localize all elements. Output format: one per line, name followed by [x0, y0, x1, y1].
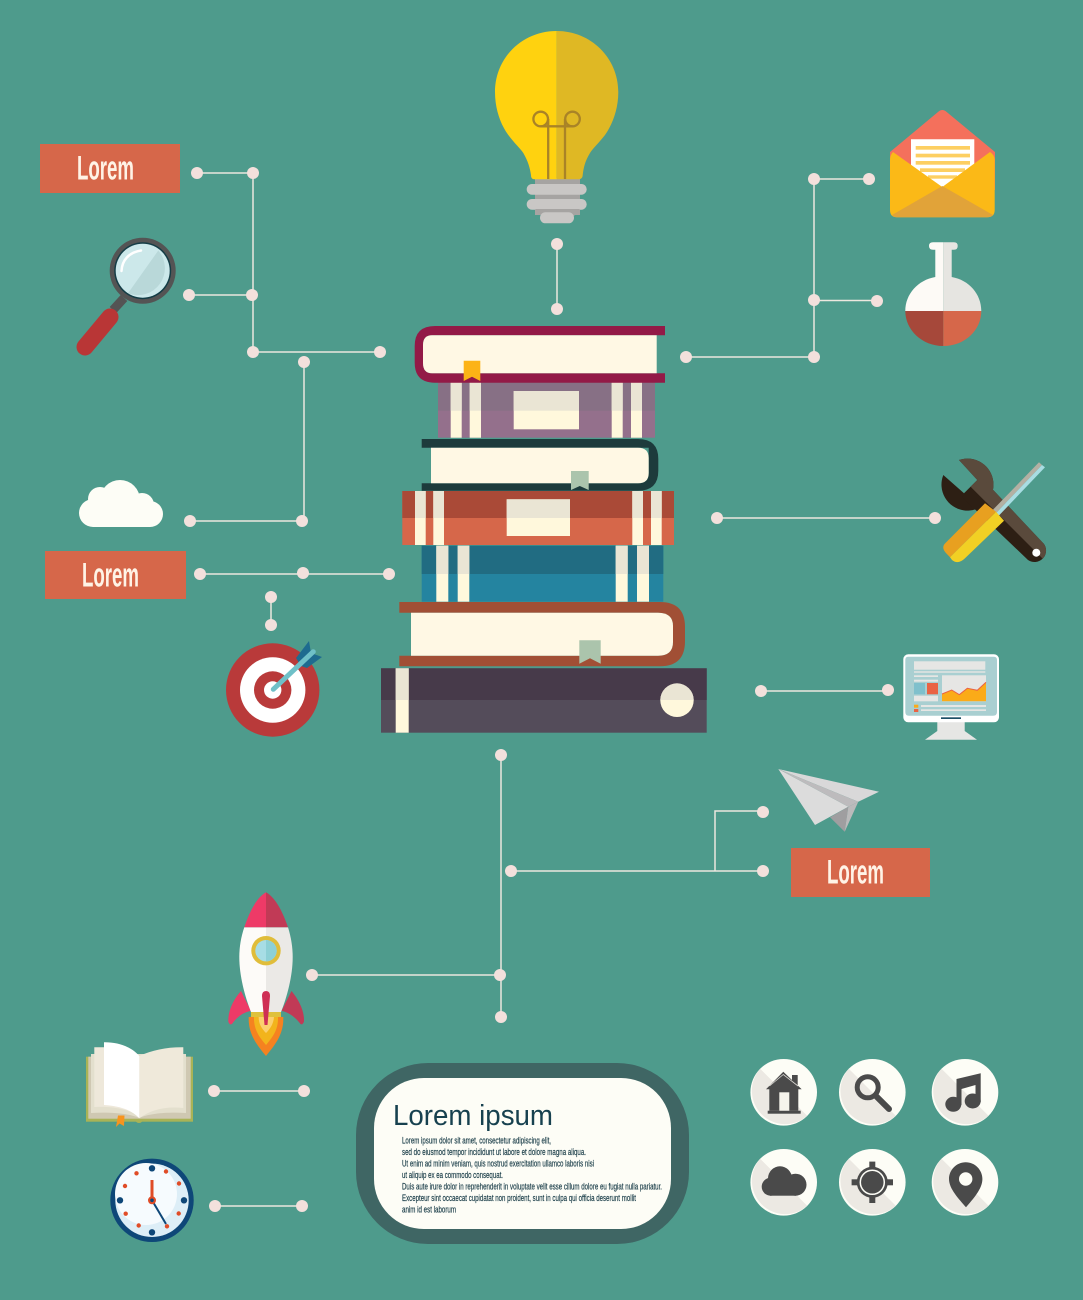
icon: envelope	[890, 110, 995, 217]
book: blue	[422, 546, 663, 602]
icon button: search	[839, 1059, 906, 1126]
icon button: music	[932, 1059, 998, 1126]
label: Lorem middle left	[45, 551, 186, 599]
icon: magnifying glass	[85, 238, 176, 347]
icon: paper plane	[778, 769, 879, 832]
label: Lorem top left: Lorem	[77, 150, 134, 188]
icon button: gear	[839, 1149, 906, 1216]
icon: desktop monitor	[903, 654, 999, 740]
bookmark: pale green	[579, 640, 601, 664]
screwdriver	[943, 462, 1045, 562]
icon button: home	[750, 1059, 817, 1126]
panel body text: Lorem ipsum dolor sit amet, consectetur adipiscing elit,	[402, 1135, 551, 1146]
panel body text: Excepteur sint occaecat cupidatat non proident, sunt in culpa qui officia deserunt mollit	[402, 1193, 636, 1204]
icon: clock	[110, 1159, 194, 1242]
book: brown	[399, 602, 685, 666]
book: purple	[438, 383, 655, 438]
connector lines and nodes	[183, 167, 941, 1212]
icon: target with arrow	[226, 641, 322, 737]
icon button: location pin	[932, 1149, 998, 1216]
book: dark teal	[422, 439, 658, 491]
panel body text: Ut enim ad minim veniam, quis nostrud exercitation ullamco laboris nisi	[402, 1159, 594, 1170]
icon: light bulb	[495, 31, 618, 223]
icon button: cloud	[750, 1149, 817, 1216]
wrench	[941, 459, 1046, 562]
label: Lorem top left	[40, 144, 180, 193]
panel body text	[402, 1135, 662, 1215]
icon: wrench and screwdriver	[941, 459, 1046, 562]
book: maroon	[415, 326, 665, 383]
book: dark purple	[381, 668, 707, 733]
book stack	[381, 326, 707, 733]
icon: rocket	[228, 892, 304, 1056]
panel body text: ut aliquip ex ea commodo consequat.	[402, 1170, 503, 1181]
icon: flask	[905, 242, 981, 346]
label: Lorem middle left: Lorem	[82, 556, 139, 594]
icon: open book	[86, 1042, 193, 1127]
panel: Lorem ipsum text box	[356, 1063, 689, 1244]
bookmark: green	[571, 471, 589, 490]
bookmark: yellow	[464, 361, 480, 381]
panel body text: sed do eiusmod tempor incididunt ut labore et dolore magna aliqua.	[402, 1147, 586, 1158]
label: Lorem right: Lorem	[827, 854, 884, 892]
book: red	[402, 491, 674, 545]
label: Lorem right	[791, 848, 930, 897]
panel body text: anim id est laborum	[402, 1204, 456, 1215]
panel heading: Lorem ipsum	[393, 1100, 553, 1132]
panel body text: Duis aute irure dolor in reprehenderit in voluptate velit esse cillum dolore eu fugiat nulla pariatur.	[402, 1182, 662, 1193]
icon: cloud	[79, 480, 163, 527]
